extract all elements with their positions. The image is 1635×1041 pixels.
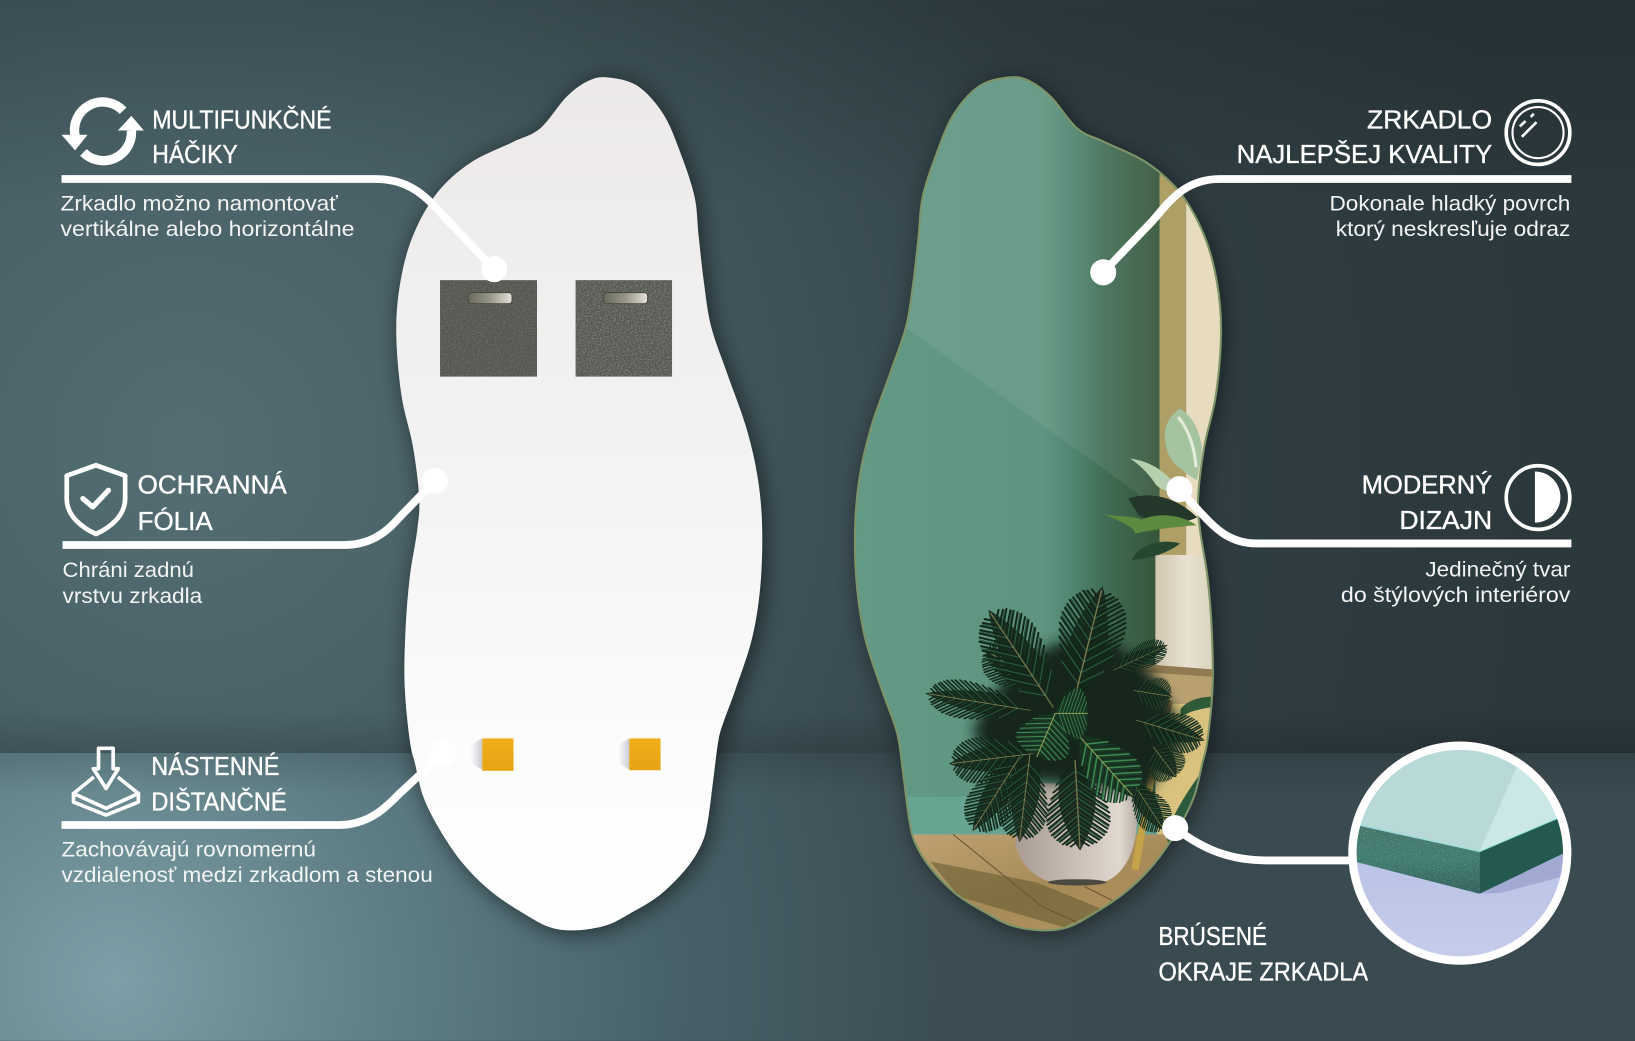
description: vrstvu zrkadla xyxy=(63,584,202,608)
callout: wall spacers xyxy=(62,740,456,887)
leader line xyxy=(63,468,448,545)
leader line xyxy=(1166,476,1571,543)
leader line xyxy=(62,179,507,282)
background floor xyxy=(0,753,1635,1041)
glass edge detail circle xyxy=(1350,741,1569,965)
description: Dokonale hladký povrch xyxy=(1329,191,1570,215)
heading: NÁSTENNÉ xyxy=(151,752,279,781)
icon: left hanger plate xyxy=(440,280,537,377)
heading: OKRAJE ZRKADLA xyxy=(1158,958,1368,986)
heading: ZRKADLO xyxy=(1367,106,1492,134)
heading: MULTIFUNKČNÉ xyxy=(152,105,332,134)
description: vzdialenosť medzi zrkadlom a stenou xyxy=(62,863,433,887)
background wall xyxy=(0,0,1635,753)
palm pot xyxy=(1015,783,1139,885)
wooden beam xyxy=(1155,174,1220,834)
mirror rim xyxy=(855,77,1221,930)
leader line xyxy=(1162,815,1356,860)
side plant pot xyxy=(1155,555,1218,670)
leader line xyxy=(62,740,456,825)
heading: NAJLEPŠEJ KVALITY xyxy=(1237,140,1492,169)
icon: round mirror xyxy=(1506,101,1570,164)
heading: MODERNÝ xyxy=(1362,470,1492,499)
stool xyxy=(1133,663,1215,870)
panel: mirror back side xyxy=(396,77,765,934)
description: vertikálne alebo horizontálne xyxy=(60,217,355,241)
callout: best quality mirror xyxy=(1090,101,1571,285)
heading: HÁČIKY xyxy=(152,140,238,169)
low plant behind xyxy=(1166,776,1198,843)
icon: half circle xyxy=(1506,466,1570,529)
heading: OCHRANNÁ xyxy=(138,470,287,499)
panel: mirror front with reflection xyxy=(845,63,1233,949)
description: do štýlových interiérov xyxy=(1341,583,1571,607)
description: ktorý neskresľuje odraz xyxy=(1336,217,1570,241)
reflection scene xyxy=(845,63,1233,949)
icon: right hanger plate xyxy=(576,280,672,377)
callout: protective foil xyxy=(63,465,448,608)
icon: shield xyxy=(67,465,125,534)
callout: modern design xyxy=(1166,466,1571,607)
heading: DIZAJN xyxy=(1399,507,1492,535)
callout: multifunctional hooks xyxy=(60,102,507,282)
leader line xyxy=(1090,179,1571,285)
icon: right spacer pad xyxy=(618,738,661,770)
description: Zrkadlo možno namontovať xyxy=(60,191,339,215)
icon: rotating arrows xyxy=(62,102,144,161)
wooden floor xyxy=(913,834,1168,930)
description: Chráni zadnú xyxy=(63,558,194,582)
palm plant xyxy=(922,578,1210,852)
description: Zachovávajú rovnomernú xyxy=(62,837,316,861)
icon: left spacer pad xyxy=(470,738,514,771)
callout: polished edges xyxy=(1158,741,1569,986)
icon: arrow onto layered plate xyxy=(74,748,138,815)
description: Jedinečný tvar xyxy=(1425,557,1570,581)
heading: FÓLIA xyxy=(138,507,213,536)
heading: BRÚSENÉ xyxy=(1158,922,1267,951)
side plant leaves xyxy=(1102,409,1202,560)
baseboard xyxy=(908,797,1158,834)
heading: DIŠTANČNÉ xyxy=(151,787,287,816)
